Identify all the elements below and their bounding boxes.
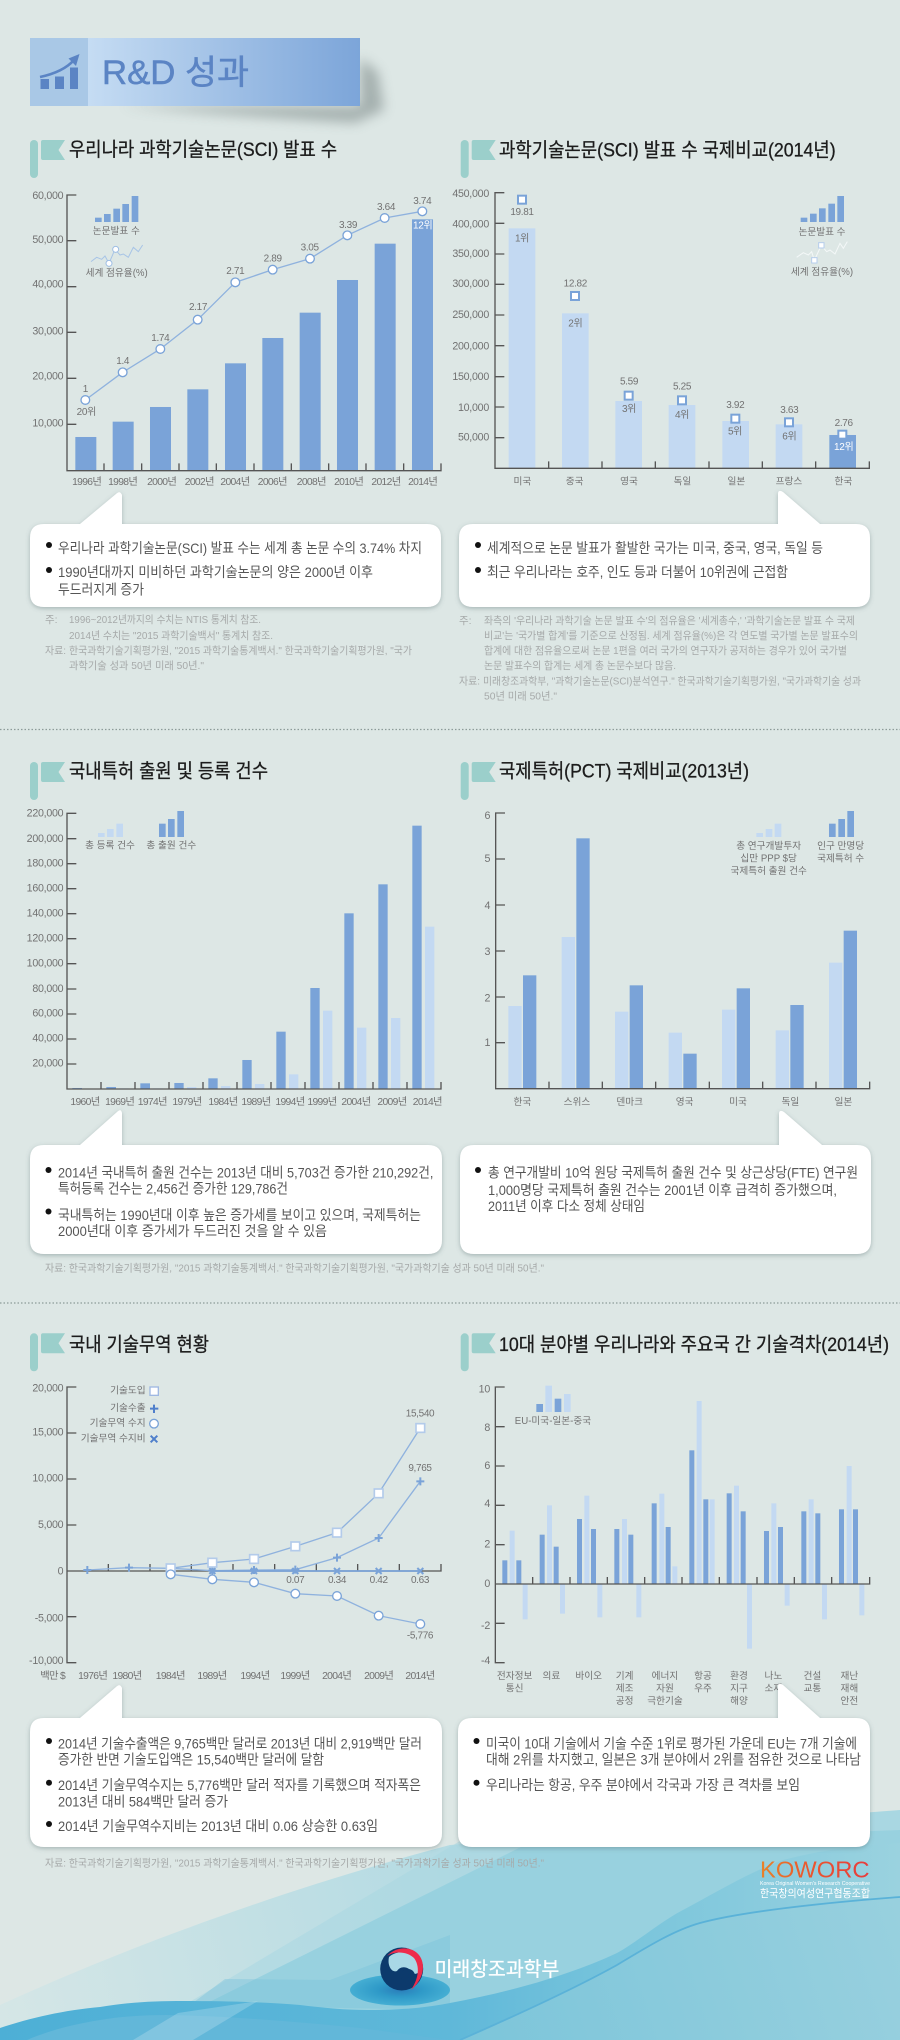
page title: R&D 성과 (102, 54, 249, 92)
logo: KOWORC: KOWORC (760, 1856, 870, 1882)
chart: technology trade lines: 10,000 (32, 1473, 64, 1485)
chart: technology gap bars: 6 (484, 1460, 490, 1472)
chart: SCI paper count with world share line: 30,000 (32, 326, 64, 338)
callout: technology gap summary: 대해 2위를 차지했고, 일본은 3개 분야에서 2위를 점유한 것으로 나타남 (486, 1752, 861, 1768)
chart: domestic patent applications and registrations: 100,000 (27, 958, 64, 970)
page header: R&D 성과 (30, 38, 384, 123)
chart: SCI paper count with world share line: 20위 (77, 405, 96, 418)
chart: technology gap bars: 공정 (616, 1696, 634, 1707)
chart: PCT by country: 스위스 (564, 1096, 590, 1108)
chart: technology trade lines: 2004년 (322, 1670, 351, 1682)
chart: SCI paper count with world share line: 2002년 (185, 476, 214, 488)
footnote: SCI comparison notes and sources: 좌측의 '우리나라 과학기술 논문 발표 수'의 점유율은 '세계총수,' '과학기술논문 발표 수 국제 (484, 615, 855, 627)
chart legend: 기술수출 (110, 1403, 146, 1414)
chart: technology gap bars: 통신 (506, 1683, 524, 1694)
chart: PCT by country: 미국 (729, 1097, 747, 1108)
chart: SCI paper count with world share line: 1.4 (116, 356, 130, 367)
callout: domestic patent summary: 특허등록 건수는 2,456건 증가한 129,786건 (58, 1181, 288, 1197)
chart legend (515, 1386, 591, 1427)
chart: technology gap bars: 2 (484, 1538, 490, 1550)
chart: SCI paper count with world share line: 3.05 (301, 242, 319, 253)
logo: Ministry of Science, ICT and Future Planning (350, 1948, 559, 2006)
chart: PCT by country: 5 (484, 853, 490, 865)
chart: PCT by country: 1 (484, 1037, 490, 1049)
chart: PCT by country: 일본 (834, 1097, 852, 1108)
chart: SCI paper count with world share line: 3.64 (377, 202, 396, 213)
chart: technology trade lines: 1976년 (78, 1670, 107, 1682)
logo: KOWORC (760, 1856, 870, 1900)
chart: PCT by country: 한국 (513, 1097, 531, 1108)
footnote: SCI comparison notes and sources: 합계에 대한 점유율으로써 논문 1편을 여러 국가의 연구자가 공저하는 경우가 있어 국가별 (484, 644, 847, 657)
callout: technology gap summary: 미국이 10대 기술에서 기술 수준 1위로 평가된 가운데 EU는 7개 기술에 (486, 1735, 857, 1751)
chart: technology trade lines: 0.63 (411, 1575, 430, 1586)
callout: technology trade summary: 2013년 대비 584백만 달러 증가 (58, 1793, 228, 1809)
chart: SCI by country: 프랑스 (776, 475, 802, 487)
chart: SCI by country: 3위 (622, 402, 636, 415)
chart: PCT by country: 독일 (781, 1097, 799, 1108)
footnote: SCI notes and sources: 자료: (45, 645, 66, 657)
chart: technology gap bars: 의료 (542, 1671, 560, 1682)
chart: SCI paper count with world share line: 2.89 (264, 253, 282, 264)
chart: domestic patent applications and registrations: 1969년 (105, 1096, 134, 1108)
chart: technology trade lines: -10,000 (29, 1655, 64, 1667)
chart: domestic patent applications and registrations: 220,000 (27, 807, 64, 819)
panel: SCI papers (30, 139, 441, 672)
callout: SCI comparison summary (459, 491, 870, 607)
panel: technology gap by field (458, 1333, 889, 1847)
callout: technology trade summary: 증가한 반면 기술도입액은 15,540백만 달러에 달함 (58, 1752, 324, 1768)
chart: technology gap bars: 우주 (694, 1683, 712, 1694)
chart: SCI paper count with world share line: 2012년 (371, 476, 401, 488)
chart: technology gap bars: 기계 (616, 1671, 634, 1682)
chart: SCI paper count with world share line: 2014년 (408, 476, 437, 488)
chart: SCI paper count with world share line: 60,000 (32, 190, 64, 202)
icon: rising bar chart (40, 54, 80, 89)
chart: technology gap bars: 4 (484, 1498, 490, 1510)
chart: domestic patent applications and registrations: 180,000 (27, 858, 64, 870)
chart: domestic patent applications and registrations (27, 807, 442, 1108)
callout: domestic patent summary (30, 1110, 442, 1254)
heading: 국내 기술무역 현황 (69, 1334, 209, 1356)
chart: SCI by country: 200,000 (452, 341, 489, 353)
chart: technology trade lines: 0 (58, 1566, 64, 1578)
heading (461, 761, 749, 800)
callout: PCT summary (460, 1111, 871, 1254)
chart legend: 총 등록 건수 (85, 840, 135, 851)
chart legend: 총 연구개발투자 (736, 841, 801, 852)
callout: SCI comparison summary: 세계적으로 논문 발표가 활발한 국가는 미국, 중국, 영국, 독일 등 (487, 540, 823, 556)
chart: PCT by country: 4 (484, 900, 490, 912)
chart: technology trade lines: 2014년 (405, 1670, 435, 1682)
footnote: SCI comparison notes and sources (459, 615, 861, 702)
chart: domestic patent applications and registrations: 40,000 (32, 1033, 64, 1045)
chart: technology trade lines: 2009년 (364, 1670, 393, 1682)
footnote: SCI notes and sources: 과학기술 성과 50년 미래 50년." (69, 660, 204, 672)
footnote: SCI comparison notes and sources: 미래창조과학부, "과학기술논문(SCI)분석연구." 한국과학기술기획평가원, "국가과학기술 성과 (483, 676, 861, 688)
chart: domestic patent applications and registrations: 2014년 (413, 1096, 442, 1108)
footnote: SCI comparison notes and sources: 비교'는 '국가별 합계'를 기준으로 산정됨. 세계 점유율(%)은 각 연도별 국가별 논문 발표수의 (484, 630, 858, 642)
chart: SCI by country: 50,000 (458, 431, 489, 443)
chart: SCI by country: 5위 (728, 424, 742, 437)
chart: SCI paper count with world share line (32, 190, 441, 488)
chart: SCI paper count with world share line: 10,000 (32, 417, 64, 429)
chart: SCI by country (452, 188, 869, 487)
chart legend: 국제특허 출원 건수 (730, 866, 807, 877)
chart: technology gap bars: 0 (484, 1578, 490, 1590)
heading (461, 140, 836, 178)
callout: domestic patent summary: 국내특허는 1990년대 이후 높은 증가세를 보이고 있으며, 국제특허는 (58, 1207, 421, 1223)
callout: SCI summary: 우리나라 과학기술논문(SCI) 발표 수는 세계 총 논문 수의 3.74% 차지 (58, 540, 422, 556)
chart: technology gap bars: 건설 (803, 1671, 821, 1682)
chart: SCI by country: 5.59 (620, 376, 639, 387)
callout: technology trade summary: 2014년 기술무역수지는 5,776백만 달러 적자를 기록했으며 적자폭은 (58, 1777, 421, 1793)
chart: SCI paper count with world share line: 2010년 (334, 476, 363, 488)
chart legend: EU-미국-일본-중국 (515, 1416, 591, 1427)
footnote: SCI comparison notes and sources: 논문 발표수의 합계는 세계 총 논문수보다 많음. (484, 660, 676, 672)
chart: technology trade lines: 0.07 (286, 1575, 305, 1586)
chart legend: 세계 점유율(%) (791, 266, 853, 278)
chart: technology trade lines: 1994년 (240, 1670, 270, 1682)
chart: technology trade lines: 1989년 (197, 1670, 227, 1682)
logo: KOWORC: 한국창의여성연구협동조합 (760, 1887, 870, 1900)
chart: SCI paper count with world share line: 40,000 (32, 279, 64, 291)
chart: SCI by country: 12위 (834, 440, 853, 453)
chart: SCI paper count with world share line: 12위 (413, 218, 432, 231)
chart legend: 기술무역 수지 (90, 1418, 146, 1429)
footnote: SCI comparison notes and sources: 자료: (459, 676, 480, 688)
chart: technology trade lines (29, 1383, 441, 1682)
chart: technology gap bars: 10 (479, 1384, 490, 1396)
chart: SCI paper count with world share line: 2.17 (189, 302, 208, 313)
panel: PCT international comparison (460, 761, 871, 1254)
callout: technology trade summary: 2014년 기술수출액은 9,765백만 달러로 2013년 대비 2,919백만 달러 (58, 1735, 422, 1751)
chart: SCI by country: 3.63 (780, 405, 799, 416)
chart: SCI by country: 중국 (566, 476, 584, 487)
chart: technology gap bars: 환경 (730, 1670, 748, 1682)
panel: domestic patents (27, 761, 544, 1274)
chart: technology gap bars: 바이오 (575, 1671, 602, 1682)
heading: 과학기술논문(SCI) 발표 수 국제비교(2014년) (499, 140, 836, 162)
chart: SCI paper count with world share line: 2008년 (297, 476, 326, 488)
chart: domestic patent applications and registrations: 200,000 (27, 833, 64, 845)
chart legend: 국제특허 수 (817, 853, 864, 864)
chart: technology gap bars: 지구 (730, 1683, 748, 1694)
chart: PCT by country: 덴마크 (616, 1097, 643, 1108)
chart: PCT by country: 2 (484, 992, 490, 1004)
callout: SCI summary: 1990년대까지 미비하던 과학기술논문의 양은 2000년 이후 (58, 564, 373, 580)
chart: technology gap bars: 자원 (656, 1683, 674, 1694)
footnote: domestic patent source: 자료: 한국과학기술기획평가원, "2015 과학기술통계백서." 한국과학기술기획평가원, "국가과학기술 성과 50년 미래 50년." (45, 1262, 544, 1274)
chart: domestic patent applications and registrations: 1994년 (275, 1096, 305, 1108)
chart: technology gap bars: 나노 (764, 1671, 782, 1682)
chart: SCI paper count with world share line: 3.74 (413, 196, 432, 207)
chart: domestic patent applications and registrations: 160,000 (27, 882, 64, 894)
chart: domestic patent applications and registrations: 2004년 (341, 1096, 371, 1108)
footnote: SCI notes and sources: 2014년 수치는 "2015 과학기술백서" 통계치 참조. (69, 630, 273, 642)
heading: 국내특허 출원 및 등록 건수 (69, 761, 268, 783)
chart: SCI by country: 미국 (513, 476, 531, 487)
heading: 우리나라 과학기술논문(SCI) 발표 수 (69, 139, 337, 161)
footnote: SCI notes and sources: 한국과학기술기획평가원, "2015 과학기술통계백서." 한국과학기술기획평가원, "국가 (69, 645, 412, 657)
chart: SCI by country: 350,000 (452, 248, 489, 260)
heading (30, 139, 337, 178)
chart: SCI paper count with world share line: 1998년 (108, 476, 137, 488)
logo: KOWORC: Korea Original Women's Research Cooperative (760, 1881, 870, 1887)
chart: technology trade lines: 0.34 (328, 1575, 347, 1586)
chart: SCI paper count with world share line: 2004년 (220, 476, 250, 488)
chart: SCI by country: 300,000 (452, 278, 489, 290)
footnote: SCI notes and sources: 주: (45, 614, 58, 626)
chart: SCI paper count with world share line: 3.39 (339, 220, 358, 231)
chart: SCI by country: 12.82 (564, 278, 588, 289)
chart: technology gap bars: 제조 (616, 1683, 634, 1694)
chart: technology trade lines: 15,000 (32, 1427, 64, 1439)
callout: PCT summary: 2011년 이후 다소 정체 상태임 (488, 1198, 645, 1214)
chart: technology trade lines: 1984년 (156, 1670, 185, 1682)
chart: domestic patent applications and registrations: 140,000 (27, 908, 64, 920)
chart legend: 논문발표 수 (93, 226, 140, 237)
callout: PCT summary: 1,000명당 국제특허 출원 건수는 2001년 이후 급격히 증가했으며, (488, 1182, 837, 1198)
callout: SCI summary: 두드러지게 증가 (58, 582, 144, 598)
chart: technology trade lines: 5,000 (38, 1519, 64, 1531)
chart: PCT by country: 6 (484, 810, 490, 822)
callout: PCT summary: 총 연구개발비 10억 원당 국제특허 출원 건수 및 상근상당(FTE) 연구원 (488, 1165, 858, 1181)
chart: domestic patent applications and registrations: 120,000 (27, 933, 64, 945)
chart: SCI by country: 독일 (673, 476, 691, 487)
chart: SCI by country: 250,000 (452, 309, 489, 321)
chart: SCI paper count with world share line: 1 (83, 384, 89, 395)
chart: technology gap bars (479, 1384, 870, 1707)
chart: SCI paper count with world share line: 2.71 (226, 266, 245, 277)
chart: technology trade lines: 20,000 (32, 1383, 64, 1395)
chart legend: 세계 점유율(%) (86, 267, 148, 279)
chart: SCI by country: 5.25 (673, 381, 692, 392)
footnote: SCI notes and sources (45, 614, 412, 672)
chart: technology gap bars: 재난 (840, 1671, 858, 1682)
chart: SCI paper count with world share line: 2006년 (258, 476, 287, 488)
chart: technology trade lines: 1999년 (280, 1670, 310, 1682)
callout: technology gap summary (458, 1684, 870, 1847)
chart: technology gap bars: 극한기술 (647, 1696, 683, 1707)
callout: SCI summary (30, 492, 441, 607)
chart: technology gap bars: -4 (481, 1655, 490, 1667)
chart: SCI paper count with world share line: 1.74 (151, 333, 170, 344)
chart: technology gap bars: 에너지 (652, 1671, 678, 1682)
chart: SCI by country: 19.81 (510, 207, 534, 218)
callout: technology trade summary: 2014년 기술무역수지비는 2013년 대비 0.06 상승한 0.63임 (58, 1818, 378, 1834)
chart: SCI by country: 150,000 (452, 371, 489, 383)
chart: domestic patent applications and registrations: 2009년 (377, 1096, 407, 1108)
heading (30, 761, 268, 800)
chart: technology gap bars: -2 (481, 1620, 490, 1632)
chart: domestic patent applications and registrations: 1974년 (138, 1096, 167, 1108)
chart: SCI by country: 일본 (727, 476, 745, 487)
chart: technology gap bars: 항공 (694, 1671, 712, 1682)
panel: SCI international comparison (452, 140, 870, 702)
chart: technology trade lines: -5,776 (407, 1630, 434, 1641)
footer wave background (0, 1810, 900, 2040)
callout: technology trade summary (30, 1685, 442, 1847)
chart: PCT by country: 영국 (676, 1097, 694, 1108)
chart: SCI by country: 10,000 (458, 402, 489, 414)
chart legend: 논문발표 수 (798, 227, 846, 238)
chart legend: 총 출원 건수 (146, 840, 196, 851)
chart: SCI by country: 2위 (568, 316, 582, 329)
chart: technology gap bars: 재해 (840, 1682, 858, 1694)
chart: technology gap bars: 안전 (840, 1696, 858, 1707)
chart: domestic patent applications and registrations: 1979년 (172, 1096, 202, 1108)
chart legend (81, 1384, 158, 1444)
chart: technology trade lines: 9,765 (408, 1463, 432, 1474)
heading: 국제특허(PCT) 국제비교(2013년) (499, 761, 749, 783)
chart: technology gap bars: 소재 (764, 1683, 782, 1694)
callout: SCI comparison summary: 최근 우리나라는 호주, 인도 등과 더불어 10위권에 근접함 (487, 564, 788, 580)
chart: technology trade lines: 1980년 (112, 1670, 142, 1682)
chart legend: 인구 만명당 (817, 841, 864, 852)
chart: domestic patent applications and registrations: 1989년 (241, 1096, 271, 1108)
chart legend: 기술도입 (110, 1384, 146, 1396)
callout: technology gap summary: 우리나라는 항공, 우주 분야에서 각국과 가장 큰 격차를 보임 (486, 1777, 800, 1793)
chart: SCI by country: 3.92 (726, 400, 745, 411)
chart: SCI paper count with world share line: 2000년 (147, 476, 176, 488)
chart legend (85, 811, 196, 851)
chart: SCI by country: 400,000 (452, 219, 489, 231)
panel: technology trade (29, 1333, 544, 1869)
chart: SCI paper count with world share line: 1996년 (72, 476, 101, 488)
chart: PCT by country: 3 (484, 946, 490, 958)
chart: SCI paper count with world share line: 20,000 (32, 370, 64, 382)
chart: SCI by country: 4위 (675, 408, 689, 421)
chart legend (730, 811, 864, 877)
chart: SCI by country: 2.76 (835, 418, 853, 429)
callout: domestic patent summary: 2014년 국내특허 출원 건수는 2013년 대비 5,703건 증가한 210,292건, (58, 1165, 433, 1181)
chart: technology gap bars: 해양 (730, 1695, 748, 1707)
chart: domestic patent applications and registrations: 1984년 (208, 1096, 238, 1108)
chart legend: 기술무역 수지비 (81, 1433, 146, 1444)
chart: SCI by country: 450,000 (452, 188, 489, 200)
footnote: SCI notes and sources: 1996~2012년까지의 수치는 NTIS 통계치 참조. (69, 614, 261, 626)
footnote: technology trade source: 자료: 한국과학기술기획평가원, "2015 과학기술통계백서." 한국과학기술기획평가원, "국가과학기술 성과 50년 미래 50년." (45, 1857, 544, 1869)
chart: technology trade lines: -5,000 (35, 1613, 64, 1625)
chart: SCI by country: 영국 (620, 476, 638, 487)
chart: technology gap bars: 전자정보 (497, 1671, 533, 1682)
chart: SCI by country: 6위 (782, 429, 796, 442)
chart: technology gap bars: 8 (484, 1422, 490, 1434)
chart: domestic patent applications and registrations: 1960년 (70, 1096, 100, 1108)
chart: SCI by country: 한국 (834, 476, 852, 487)
chart legend: 십만 PPP $당 (740, 853, 797, 864)
chart: technology gap bars: 교통 (803, 1683, 821, 1694)
chart: SCI by country: 1위 (515, 231, 529, 244)
footnote: SCI comparison notes and sources: 주: (459, 615, 472, 627)
logo: Ministry of Science, ICT and Future Planning: 미래창조과학부 (435, 1958, 559, 1981)
footnote: SCI comparison notes and sources: 50년 미래 50년." (484, 690, 557, 702)
callout: domestic patent summary: 2000년대 이후 증가세가 두드러진 것을 알 수 있음 (58, 1223, 327, 1239)
chart: SCI paper count with world share line: 50,000 (32, 234, 64, 246)
chart: domestic patent applications and registrations: 60,000 (32, 1007, 64, 1019)
chart: PCT by country (484, 810, 870, 1108)
chart: domestic patent applications and registrations: 80,000 (32, 983, 64, 995)
chart: domestic patent applications and registrations: 1999년 (307, 1096, 337, 1108)
chart: technology trade lines: 15,540 (406, 1408, 435, 1419)
chart: technology trade lines: 백만 $ (40, 1670, 66, 1682)
heading (461, 1333, 889, 1371)
chart legend (791, 196, 853, 278)
chart: domestic patent applications and registrations: 20,000 (32, 1058, 64, 1070)
chart legend (86, 196, 148, 279)
chart: technology trade lines: 0.42 (370, 1575, 388, 1586)
heading (30, 1333, 209, 1371)
